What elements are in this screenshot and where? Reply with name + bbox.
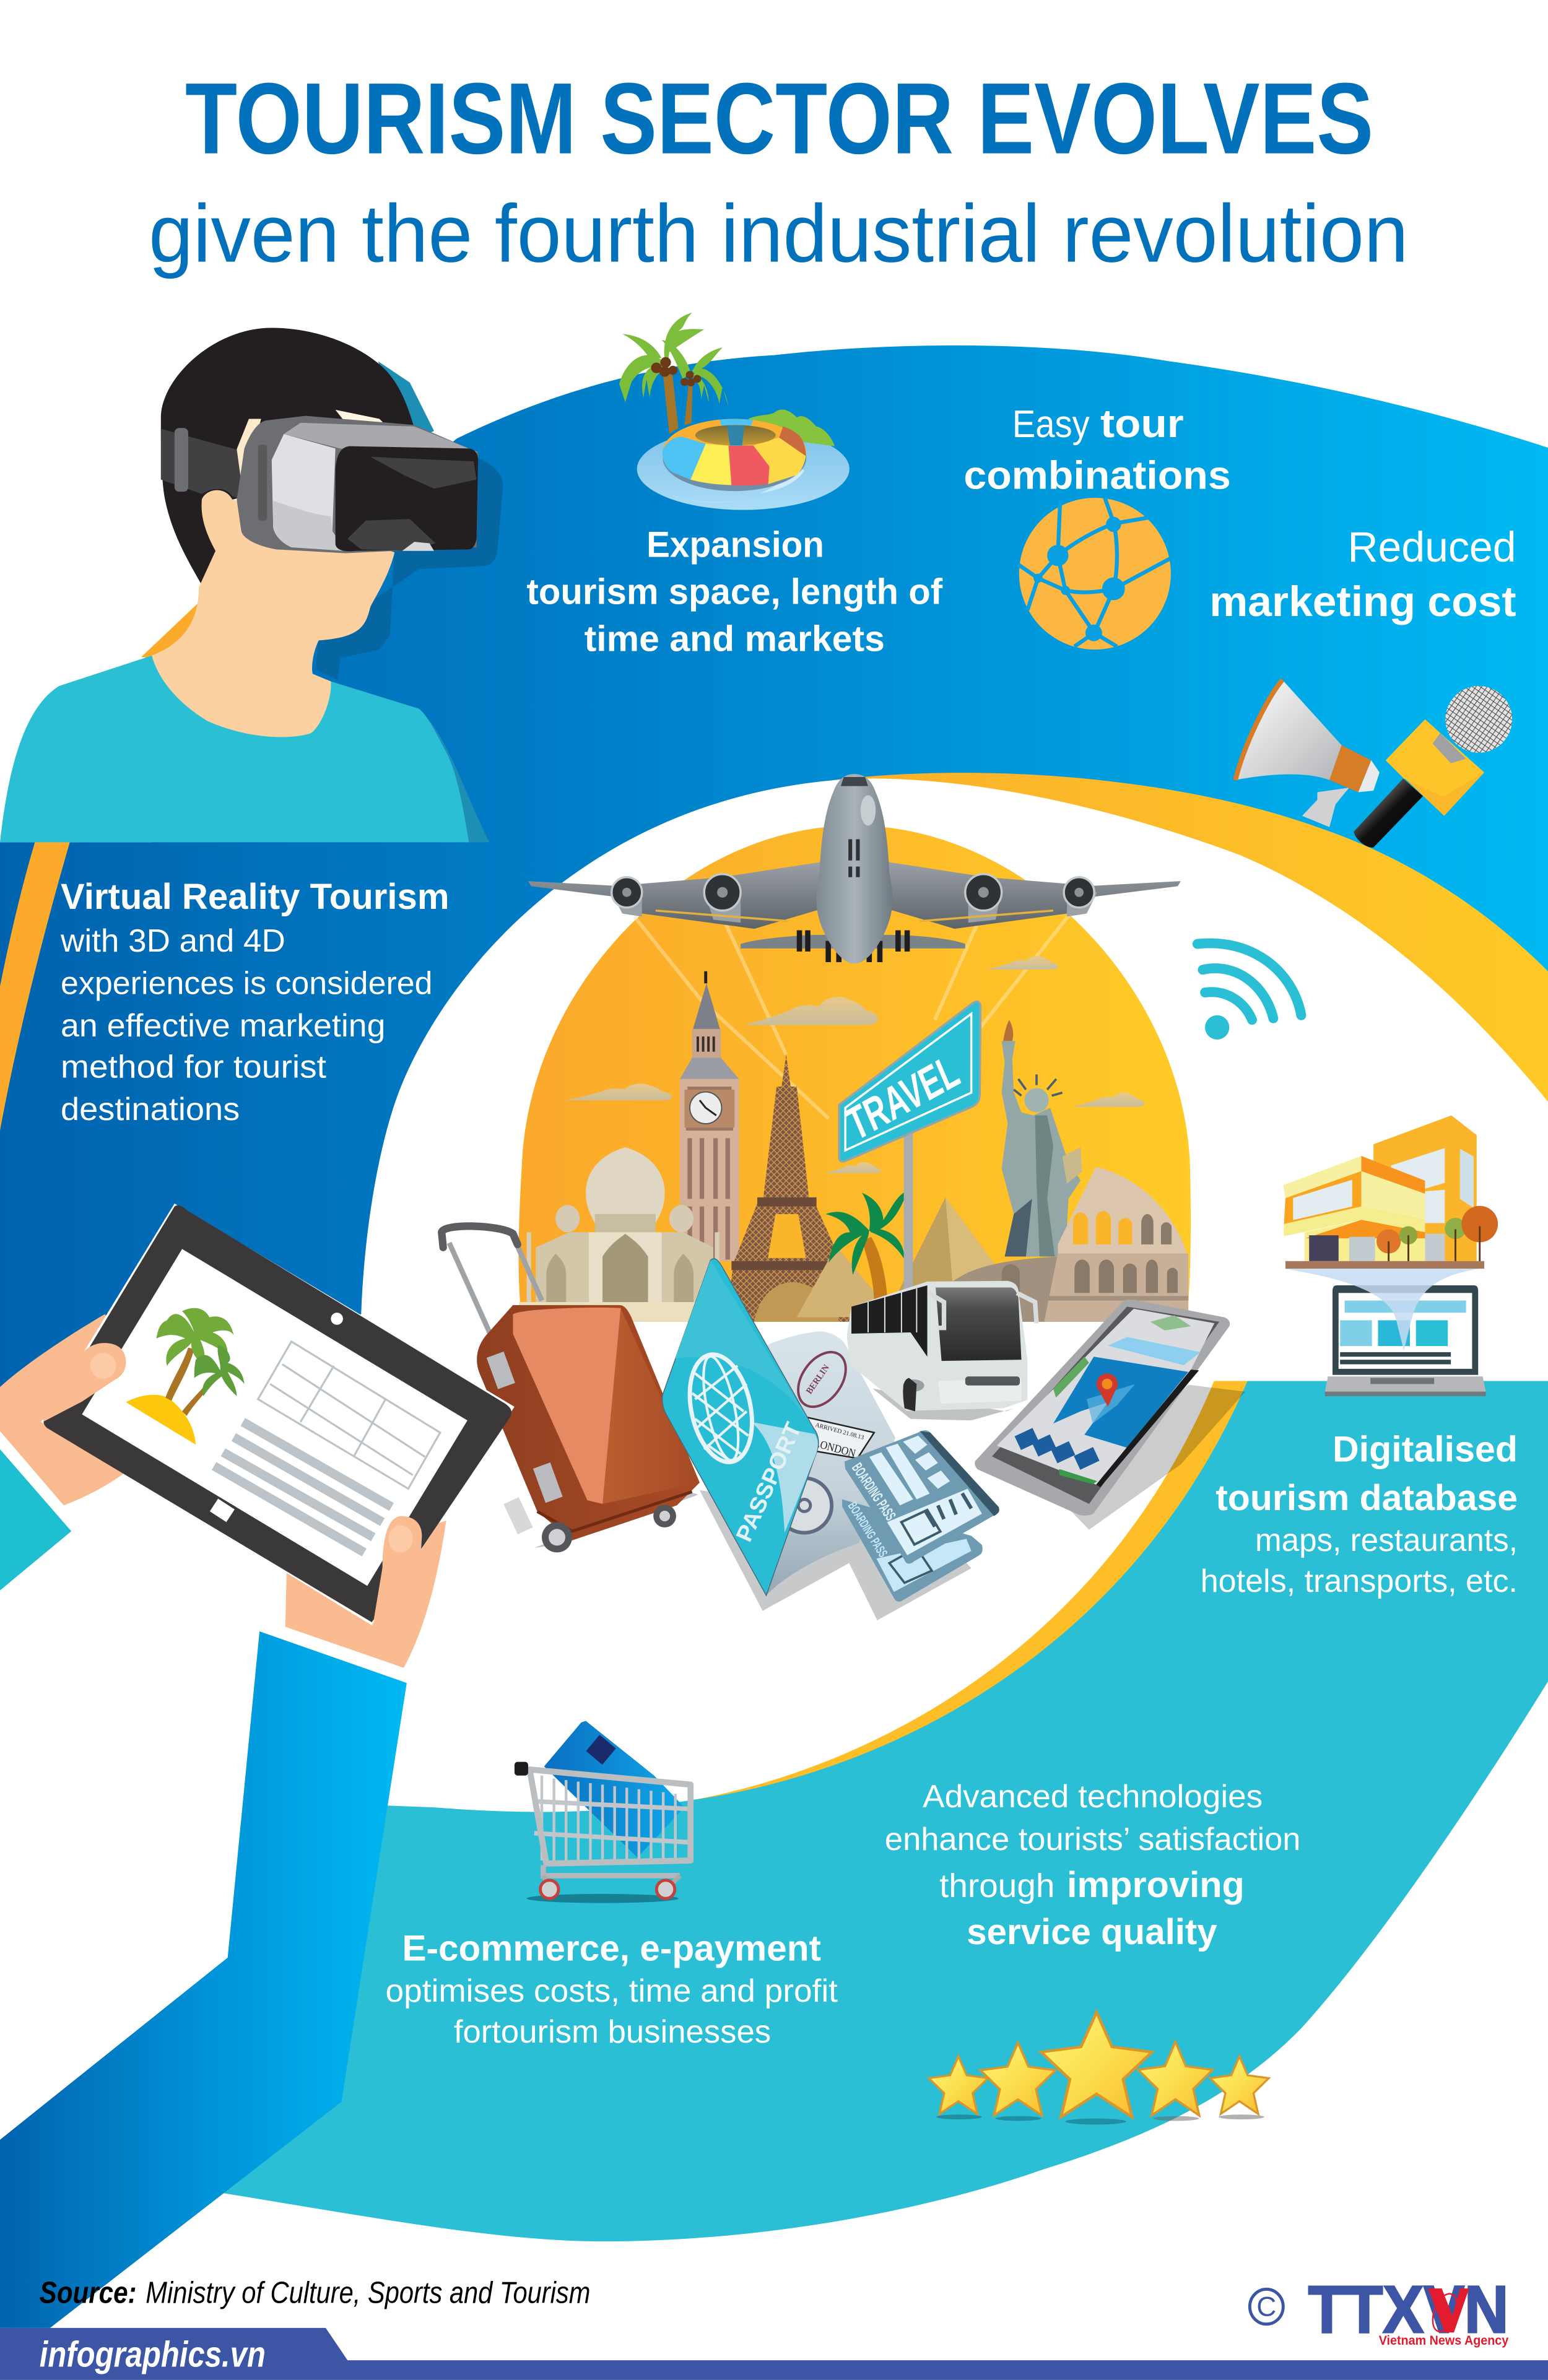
sun dome — [518, 825, 1191, 1322]
source note: Ministry of Culture, Sports and Tourism — [146, 2276, 590, 2309]
text: digitalised tourism database: Digitalised — [1333, 1429, 1518, 1469]
wings — [522, 862, 821, 929]
illustration: passport and boarding passes: BOARDING PASS — [845, 1500, 890, 1560]
Statue of Liberty — [1002, 1020, 1082, 1256]
illustration: bus — [847, 1281, 1037, 1420]
text: digitalised tourism database — [1201, 1429, 1518, 1599]
text: reduced marketing cost: Reduced — [1347, 523, 1516, 571]
icon: microphone — [1354, 686, 1512, 848]
text: e-commerce: fortourism businesses — [454, 2013, 771, 2049]
passport cover — [663, 1259, 819, 1596]
text: digitalised tourism database: maps, restaurants, — [1255, 1522, 1518, 1558]
palm tree — [825, 1191, 908, 1305]
text: virtual reality tourism — [60, 877, 449, 1127]
logo: TTXVN: TTXVN — [1308, 2272, 1508, 2347]
light beams — [635, 912, 1071, 1118]
text: virtual reality tourism: an effective marketing — [61, 1007, 386, 1043]
landing gear — [797, 931, 910, 962]
text: e-commerce: E-commerce, e-payment — [402, 1929, 821, 1969]
passport pages — [767, 1331, 895, 1596]
text: advanced technologies: Advanced technologies — [923, 1778, 1263, 1814]
text: easy tour combinations — [963, 401, 1231, 497]
text: advanced technologies: improving — [1067, 1865, 1245, 1905]
illustration: right hand — [285, 1518, 446, 1668]
text: expansion: time and markets — [585, 619, 885, 659]
footer bar — [0, 2328, 1548, 2380]
icon: pool float and palm island — [619, 313, 850, 510]
illustration: passport and boarding passes: PASSPORT — [731, 1418, 806, 1545]
tablet content: palm island — [126, 1308, 245, 1444]
text: easy tour combinations: combinations — [963, 453, 1231, 497]
engines — [612, 874, 1097, 923]
illustration: left hand — [0, 1314, 152, 1505]
text: expansion: Expansion — [646, 525, 824, 565]
text: advanced technologies: through — [939, 1867, 1054, 1904]
text: reduced marketing cost — [1209, 523, 1516, 625]
text: virtual reality tourism: with 3D and 4D — [60, 923, 285, 958]
text: expansion: tourism space, length of — [526, 572, 942, 612]
text: virtual reality tourism: method for tourist — [61, 1048, 326, 1084]
illustration: airplane — [522, 774, 1187, 963]
illustration: passport and boarding passes: LONDON — [813, 1436, 857, 1459]
icon: megaphone — [1235, 680, 1380, 827]
icon: network globe — [1019, 498, 1171, 649]
icon: five stars rating — [929, 2012, 1269, 2124]
Eiffel Tower — [727, 1054, 867, 1322]
boarding pass front — [845, 1430, 999, 1564]
illustration: passport and boarding passes: BOARDING PASS — [848, 1460, 898, 1524]
illustration: passport and boarding passes — [663, 1259, 999, 1620]
Colosseum — [952, 1167, 1188, 1322]
text: easy tour combinations: tour — [1100, 401, 1184, 446]
illustration: landmarks scene — [518, 825, 1191, 1322]
illustration: map phone — [975, 1300, 1245, 1530]
illustration: sleeve — [0, 1631, 407, 2328]
tablet content: text bars — [214, 1422, 391, 1552]
Travel sign: TRAVEL — [840, 1044, 966, 1150]
text: advanced technologies: service quality — [967, 1912, 1217, 1952]
illustration: suitcase — [441, 1226, 700, 1552]
Travel sign — [839, 1002, 980, 1295]
footer bar: infographics.vn — [40, 2334, 266, 2374]
Big Ben — [680, 971, 739, 1261]
boarding pass back — [842, 1500, 983, 1602]
icon: wifi — [1198, 943, 1301, 1040]
text: digitalised tourism database: tourism database — [1215, 1478, 1518, 1518]
illustration: VR person — [0, 328, 503, 842]
text: advanced technologies: enhance tourists’ satisfaction — [885, 1821, 1300, 1857]
logo: TTXVN: C — [1256, 2291, 1276, 2322]
illustration: teal forearm — [0, 1449, 71, 1591]
text: reduced marketing cost: marketing cost — [1209, 578, 1516, 625]
text: virtual reality tourism: destinations — [61, 1091, 240, 1127]
fingers — [30, 1343, 422, 1622]
illustration: tablet — [41, 1204, 515, 1625]
icon: hotel building — [1283, 1116, 1498, 1269]
tablet content: table — [258, 1342, 440, 1488]
illustration: passport and boarding passes: BERLIN — [804, 1363, 832, 1396]
source note: Source: — [40, 2276, 137, 2309]
text: advanced technologies — [885, 1778, 1300, 1952]
fuselage — [817, 774, 892, 963]
text: digitalised tourism database: hotels, transports, etc. — [1201, 1563, 1518, 1599]
text: e-commerce: optimises costs, time and profit — [386, 1973, 838, 2009]
text: virtual reality tourism: experiences is considered — [61, 965, 433, 1001]
background shapes — [0, 345, 1548, 2241]
subtitle: given the fourth industrial revolution — [149, 188, 1409, 280]
icon: laptop — [1284, 1269, 1486, 1396]
illustration: passport and boarding passes: ARRIVED 21.08.13 — [814, 1422, 864, 1441]
text: virtual reality tourism: Virtual Reality Tourism — [61, 877, 449, 917]
clouds — [565, 956, 1144, 1173]
pyramids — [797, 1197, 1014, 1320]
text: easy tour combinations: Easy — [1012, 402, 1090, 446]
icon: shopping cart with card — [515, 1721, 690, 1903]
text: e-commerce — [386, 1929, 838, 2049]
tailplane — [741, 935, 965, 949]
logo: TTXVN: Vietnam News Agency — [1379, 2334, 1509, 2348]
VR goggles — [161, 410, 478, 553]
text: expansion — [526, 525, 942, 659]
Taj Mahal — [519, 1135, 724, 1322]
